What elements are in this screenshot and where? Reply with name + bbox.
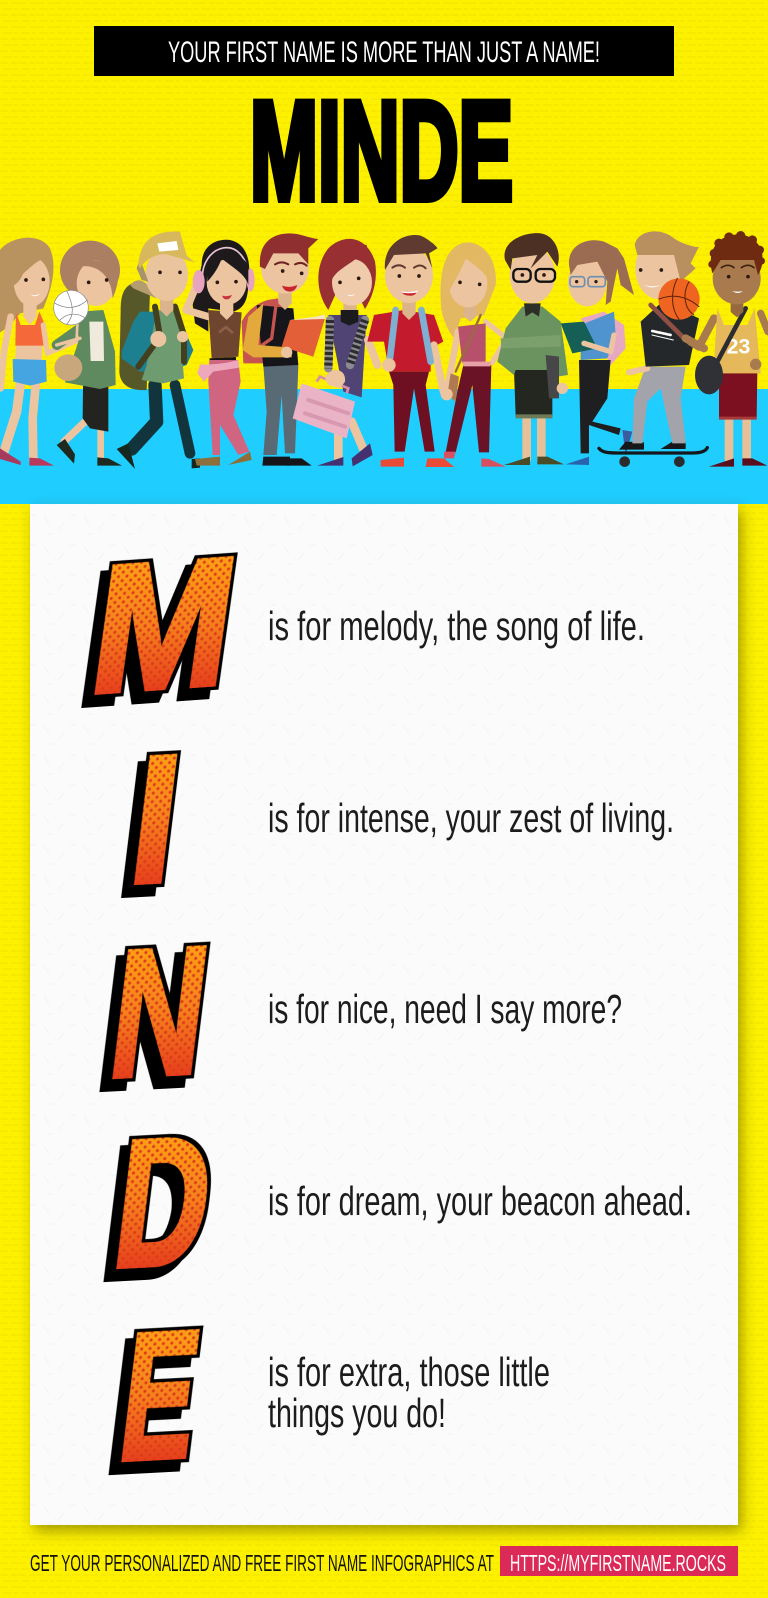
letter M: M — [81, 518, 248, 732]
person 11: skater with basketball — [599, 231, 707, 467]
tagline banner — [94, 26, 674, 76]
title: name: MINDE — [250, 72, 513, 229]
left six people — [0, 231, 376, 469]
letter E: E — [111, 1293, 209, 1499]
meaning of E — [268, 1349, 550, 1436]
person 7: boy in red shirt — [367, 235, 454, 467]
person 9: boy with black glasses — [497, 233, 568, 465]
panel: name meanings — [30, 504, 738, 1525]
person 3: backpacker with cap — [117, 231, 200, 469]
person 4: girl with headphones — [186, 240, 255, 466]
right six people — [367, 231, 768, 467]
letter D: D — [105, 1099, 222, 1306]
letter I: I — [121, 718, 190, 922]
meaning of E: things you do! — [268, 1390, 446, 1436]
person 12: boy in yellow jersey 23: 23 — [727, 334, 751, 358]
person 5: boy with red book — [242, 233, 325, 466]
illustration: group of twelve people — [0, 231, 768, 469]
meaning of E: is for extra, those little — [268, 1349, 550, 1395]
meaning of N: is for nice, need I say more? — [268, 986, 622, 1032]
person 12: boy in yellow jersey 23 — [691, 231, 768, 467]
letter N: N — [101, 909, 218, 1116]
person 8: blonde girl — [426, 242, 507, 467]
blue floor band — [0, 389, 768, 504]
person 6: red-haired girl with pink case — [293, 239, 376, 466]
person 10: girl with glasses and tablet — [561, 240, 634, 465]
footer — [30, 1546, 738, 1576]
person 1: girl in orange top — [0, 238, 80, 466]
person 2: girl with volleyball and green jacket — [54, 241, 122, 466]
